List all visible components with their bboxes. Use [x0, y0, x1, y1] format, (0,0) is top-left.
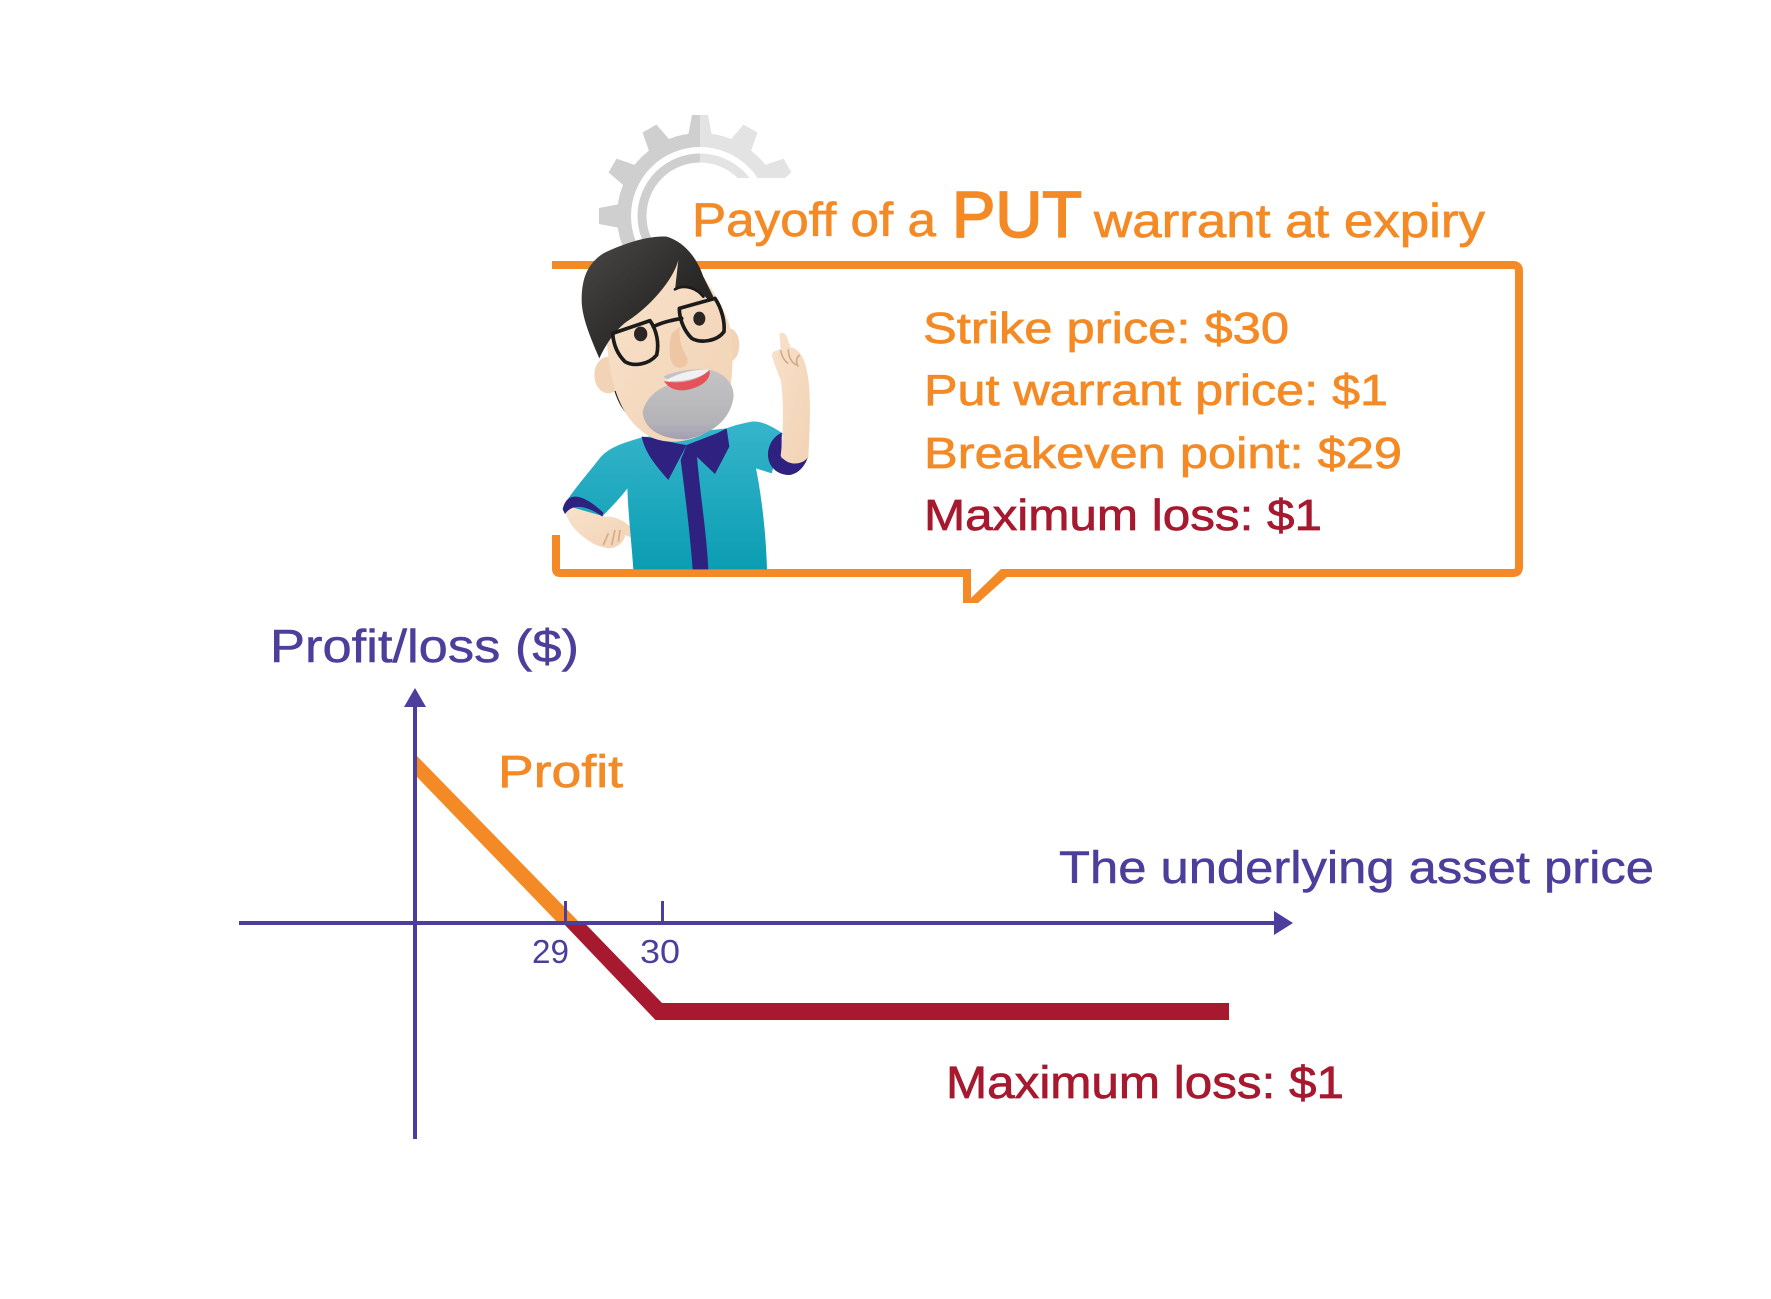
title: Payoff of a [692, 193, 937, 246]
mouth [665, 369, 709, 381]
finger creases [603, 349, 800, 545]
infographic canvas [239, 115, 1652, 1139]
ears [594, 357, 622, 393]
label: profit: Profit [498, 746, 624, 797]
hair [582, 236, 713, 358]
icon: gear behind title [599, 115, 792, 246]
text block: warrant details: Breakeven point: $29 [924, 429, 1402, 478]
right arm and hand [772, 333, 810, 464]
orange profit segment [417, 756, 581, 924]
heading: y-axis label: Profit/loss ($) [270, 620, 579, 672]
tick label 30: 30 [640, 933, 680, 970]
panel: speech bubble outline [552, 265, 1519, 603]
tick marks [564, 901, 664, 923]
title: warrant at expiry [1093, 194, 1486, 247]
beard [643, 369, 734, 439]
face [607, 260, 732, 442]
pupils [634, 327, 647, 341]
left arm and hand [565, 508, 637, 548]
shirt [564, 422, 783, 569]
red loss segment [564, 924, 1229, 1020]
label: x-axis title: The underlying asset price [1059, 842, 1654, 893]
title [692, 178, 1486, 251]
label: maximum loss: Maximum loss: $1 [946, 1057, 1344, 1108]
title: PUT [952, 178, 1082, 251]
nose [670, 327, 688, 368]
text block: warrant details: Maximum loss: $1 [924, 491, 1322, 540]
text block: warrant details: Strike price: $30 [923, 304, 1289, 353]
text block: warrant details: Put warrant price: $1 [924, 366, 1388, 415]
glasses [613, 287, 724, 364]
x axis with arrow [239, 911, 1293, 935]
y axis with arrow [404, 688, 426, 1139]
shirt placket [681, 445, 708, 569]
collar [642, 428, 729, 480]
text block: warrant details [923, 304, 1402, 540]
right cuff [768, 433, 808, 475]
tick label 29: 29 [532, 933, 569, 970]
chart: payoff diagram [239, 688, 1293, 1139]
left cuff [563, 497, 603, 517]
icon: cartoon man pointing up [563, 236, 810, 569]
